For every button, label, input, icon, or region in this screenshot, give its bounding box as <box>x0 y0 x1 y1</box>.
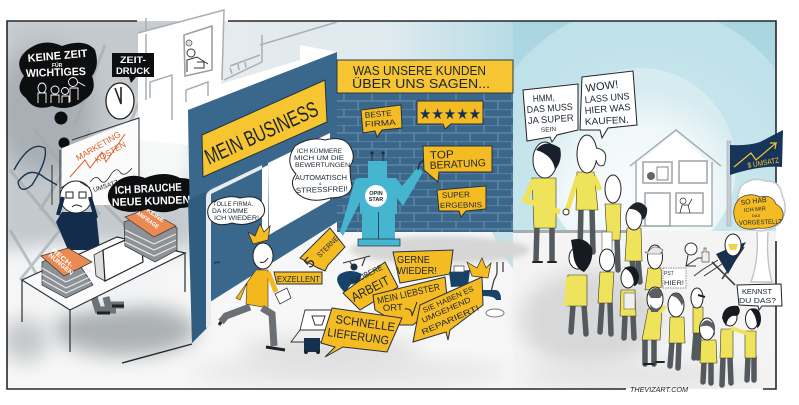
sign: 5 Sterne: 5 <box>301 254 319 272</box>
speech bubble: Hmm: JA SUPER <box>527 113 574 127</box>
speech cloud: robot: & <box>319 181 322 186</box>
door frame and opening <box>206 165 262 328</box>
sign: 5 Sterne <box>300 228 345 272</box>
thought cloud: keine Zeit: KEINE ZEIT <box>27 48 88 65</box>
speech cloud: customer: ICH WIEDER! <box>214 215 259 222</box>
sign: Schnelle Lieferung: LIEFERUNG <box>327 325 390 348</box>
speech cloud: customer: DA KOMME <box>212 208 249 215</box>
thought cloud: keine Zeit: FÜR <box>52 62 63 69</box>
thought dots <box>54 112 72 170</box>
sign: Exzellent <box>274 272 322 284</box>
flag: Umsatz <box>727 130 783 226</box>
speech bubble: Hmm <box>523 84 578 142</box>
sign: Saubere Arbeit: ARBEIT <box>349 273 392 305</box>
speech cloud: robot: AUTOMATISCH <box>295 175 347 182</box>
brick wall <box>337 93 513 232</box>
sign: Super Ergebnis: ERGEBNIS <box>440 200 482 210</box>
sign: Top Beratung <box>423 146 492 182</box>
person: bald tall <box>691 288 705 358</box>
sign: Top Beratung: BERATUNG <box>430 157 486 172</box>
person: curly hair <box>566 239 592 334</box>
sign: 5 Sterne: STERNE <box>315 234 341 259</box>
thought cloud: neue Kunden: NEUE KUNDEN! <box>112 194 194 209</box>
person relaxing in deck chair <box>694 234 746 285</box>
sign: Gerne wieder: WIEDER! <box>397 266 437 277</box>
paper stack: Anfragen <box>124 208 177 262</box>
sign: Top Beratung: TOP <box>430 149 454 162</box>
person: glasses <box>598 249 614 334</box>
speech bubble: Hmm: DAS MUSS <box>526 102 573 116</box>
sign: Mein liebster Ort: ORT <box>383 302 404 313</box>
person: child with clipboard <box>602 175 621 270</box>
background building <box>138 10 337 145</box>
icon: blue box and crown <box>449 258 491 287</box>
icon: tap and wrench <box>483 262 504 317</box>
sign: Exzellent: EXZELLENT <box>277 275 320 284</box>
sign: five stars <box>417 101 483 129</box>
speech bubble: Kennst du das: DU DAS? <box>739 296 776 305</box>
thought cloud: so hab ich mir: VORGESTELLT <box>739 219 782 227</box>
thought cloud: neue Kunden: ICH BRAUCHE <box>115 182 182 197</box>
person: bald man with vest <box>668 293 685 368</box>
thought cloud: keine Zeit <box>19 42 97 108</box>
sign: Schnelle Lieferung: SCHNELLE <box>335 312 396 334</box>
house <box>630 130 721 226</box>
chart board: Marketing-Kosten <box>52 118 140 205</box>
person: man with dark hair <box>525 142 561 262</box>
chart board: Marketing-Kosten: MARKETING <box>74 129 122 163</box>
person: woman with ponytail <box>563 135 606 252</box>
clock <box>106 83 134 119</box>
speech bubble: Wow: LASS UNS <box>584 91 630 106</box>
person: dark hair profile <box>625 202 647 282</box>
person: with cap <box>645 245 663 290</box>
sign: Saubere Arbeit: SAUBERE <box>349 263 384 287</box>
sign: five stars: ★★★★★ <box>419 106 481 123</box>
speech bubble: Wow <box>580 71 637 138</box>
sign: Beste Firma <box>361 105 402 137</box>
banner: customer heading: WAS UNSERE KUNDEN <box>353 64 486 78</box>
paper stack: Anfragen: ANFRAGE <box>135 211 160 231</box>
person: with notebook <box>620 266 639 338</box>
speech bubble: Wow: KAUFEN. <box>585 115 629 128</box>
floor line <box>122 344 192 363</box>
thought cloud: so hab ich mir <box>734 195 783 229</box>
robot: STAR <box>369 197 383 203</box>
flag: Umsatz: $ UMSATZ <box>747 155 780 170</box>
speech bubble: Kennst du das <box>737 284 782 310</box>
speech cloud: robot: BEWERTUNGEN <box>295 162 350 169</box>
signature: thevizart.com: THEVIZART.COM <box>630 387 688 394</box>
person: long black hair <box>720 306 740 385</box>
sign: Beste Firma: FIRMA <box>365 118 397 129</box>
small sign: hier: HIER! <box>664 281 684 287</box>
person: pointing <box>731 308 761 380</box>
sign: Mein liebster Ort <box>373 277 447 325</box>
child with sandcastle <box>685 243 709 266</box>
speech cloud: customer <box>208 197 265 225</box>
speech cloud: robot: STRESSFREI! <box>296 184 348 195</box>
banner: customer heading <box>337 60 513 93</box>
thought cloud: neue Kunden <box>108 174 199 212</box>
person: bearded man <box>642 287 665 364</box>
chart board: Marketing-Kosten: KOSTEN <box>93 139 127 165</box>
paper stack: Rechnungen <box>41 247 93 298</box>
sign: Beste Firma: BESTE <box>364 109 392 120</box>
sign: Mein liebster Ort: MEIN LIEBSTER <box>376 282 441 307</box>
window with figure <box>184 26 212 76</box>
thought cloud: so hab ich mir: ICH MIR <box>744 206 766 214</box>
drone <box>343 256 370 270</box>
sign: Mein Business: MEIN BUSINESS <box>201 96 322 170</box>
paper stack: Rechnungen: NUNGEN <box>47 252 74 277</box>
scribble <box>14 146 57 189</box>
thought cloud: so hab ich mir: SO HAB <box>740 197 767 207</box>
sign: Super Ergebnis: SUPER <box>442 190 470 200</box>
building: Mein Business <box>188 52 337 343</box>
robot: OPIN <box>369 191 383 197</box>
happy customer with crown <box>219 224 291 350</box>
laptop <box>94 233 143 281</box>
sign: Sie haben es umgehend repariert: SIE HABEN ES <box>421 284 475 315</box>
speech cloud: robot <box>290 139 353 200</box>
sign: Mein Business <box>201 80 327 177</box>
sign: Super Ergebnis <box>437 186 486 217</box>
desk <box>22 237 185 352</box>
speech bubble: Hmm: HMM, <box>532 92 555 105</box>
Zeitdruck label: ZEIT- <box>120 55 146 66</box>
person: arms crossed <box>700 318 717 383</box>
sign: Saubere Arbeit <box>343 262 398 310</box>
speech cloud: robot: MICH UM DIE <box>294 155 345 162</box>
icon: blue c shape <box>337 271 362 294</box>
speech bubble: Wow: HIER WAS <box>584 102 631 117</box>
sign: Sie haben es umgehend repariert: UMGEHEND <box>420 295 473 325</box>
small sign: hier <box>663 268 686 288</box>
sign: Sie haben es umgehend repariert <box>413 277 483 342</box>
small sign: hier: PST <box>664 271 674 277</box>
speech bubble: Wow: WOW! <box>585 78 619 95</box>
speech bubble: Kennst du das: KENNST <box>742 287 772 296</box>
sign: Gerne wieder <box>393 250 453 283</box>
robot <box>340 151 424 246</box>
Zeitdruck label: DRUCK <box>116 66 150 77</box>
paper stack: Anfragen: KEINE <box>145 208 165 224</box>
thought cloud: keine Zeit: WICHTIGES <box>26 66 86 80</box>
paper stack: Rechnungen: RECH- <box>50 247 74 269</box>
tree <box>737 179 785 282</box>
stressed man <box>56 181 124 313</box>
sign: Schnelle Lieferung <box>321 308 402 357</box>
laptop with shopping cart <box>291 310 332 354</box>
chart board: Marketing-Kosten: UMSATZ <box>92 179 119 194</box>
speech bubble: Hmm: SEIN <box>541 126 557 134</box>
speech cloud: customer: TOLLE FIRMA. <box>213 201 253 208</box>
banner: customer heading: ÜBER UNS SAGEN... <box>352 77 490 91</box>
sign: Gerne wieder: GERNE <box>397 255 430 266</box>
sign: Sie haben es umgehend repariert: REPARIERT! <box>420 303 480 337</box>
thought cloud: so hab ich mir: DAS <box>752 213 761 218</box>
Zeitdruck label <box>112 53 154 83</box>
speech cloud: robot: ICH KÜMMERE <box>297 147 343 155</box>
